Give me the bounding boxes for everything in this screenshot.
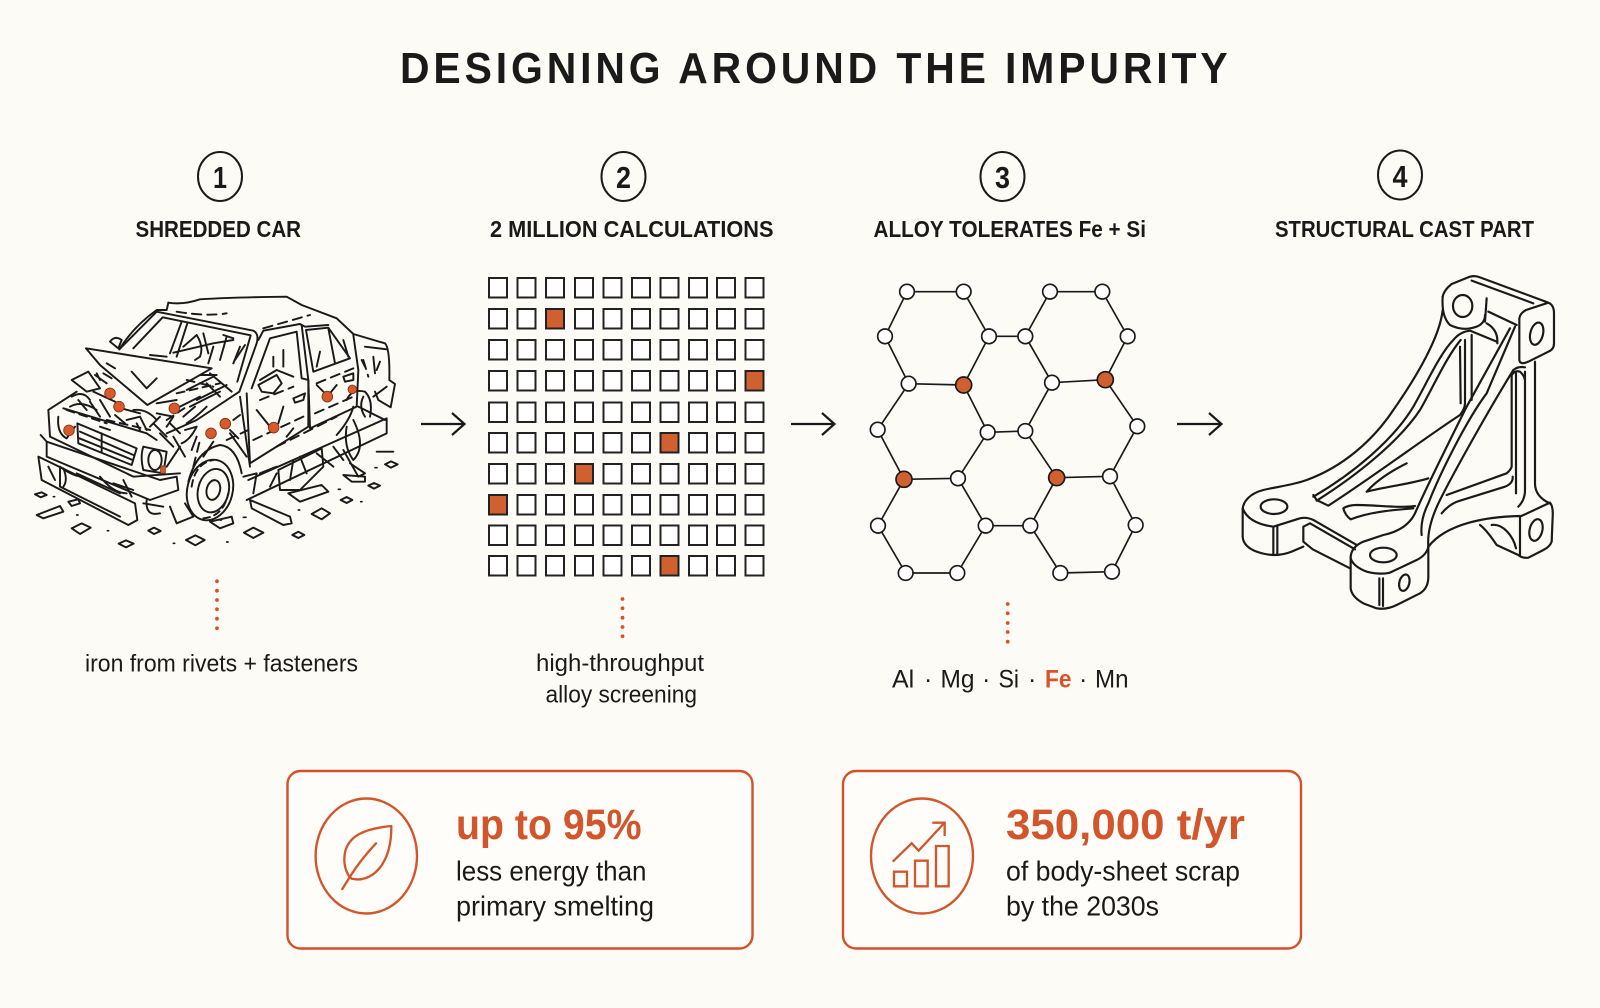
callout marker: lattice dotted leader [1006, 602, 1010, 644]
step 1 number badge [198, 152, 242, 201]
caption: alloy elements: · [924, 666, 932, 694]
step 3 number badge [980, 152, 1024, 201]
stat panel: energy savings [288, 771, 752, 948]
stat description: less energy than [456, 856, 646, 886]
step 2 number badge [602, 152, 646, 201]
left window ribs [1313, 331, 1497, 497]
arrow 2 to 3 [791, 413, 834, 435]
callout marker: car dotted leader [215, 579, 219, 630]
illustration: shredded car [35, 297, 398, 547]
lower web [1367, 463, 1428, 492]
caption: alloy elements [892, 666, 1128, 694]
caption: alloy elements: Fe [1045, 666, 1072, 694]
title: DESIGNING AROUND THE IMPURITY [400, 45, 1228, 93]
step 4 number badge [1378, 150, 1422, 200]
step 3 number badge: 3 [995, 160, 1010, 195]
iron atoms [896, 372, 1113, 487]
icon: rising bar chart [871, 798, 973, 914]
step 4 number badge: 4 [1392, 159, 1408, 194]
left strut [1243, 310, 1443, 555]
caption: high-throughput alloy screening: alloy screening [546, 682, 697, 708]
step 1 heading: SHREDDED CAR [136, 216, 301, 242]
stat: up to 95%: up to 95% [456, 801, 642, 849]
stat: 350,000 t/yr: 350,000 t/yr [1006, 801, 1245, 849]
step 3 heading: ALLOY TOLERATES Fe + Si [874, 216, 1146, 242]
stat description [1006, 856, 1240, 922]
caption: alloy elements: · [1079, 666, 1087, 694]
stat description: by the 2030s [1006, 890, 1159, 922]
stat description [456, 856, 654, 922]
caption: high-throughput alloy screening [536, 650, 704, 708]
front pad [1351, 328, 1510, 557]
caption: alloy elements: · [1028, 666, 1036, 694]
stat description: of body-sheet scrap [1006, 856, 1240, 886]
caption: alloy elements: Si [998, 666, 1019, 694]
hexagonal alloy lattice [870, 284, 1145, 580]
caption: iron from rivets: iron from rivets + fasteners [85, 650, 358, 678]
caption: alloy elements: Mg [940, 666, 974, 694]
caption: alloy elements: Al [892, 666, 914, 694]
step 4 heading: STRUCTURAL CAST PART [1275, 216, 1534, 242]
step 1 number badge: 1 [213, 160, 227, 195]
icon: leaf [316, 798, 417, 914]
arrow 3 to 4 [1177, 413, 1222, 435]
diagonal strut [1421, 327, 1515, 535]
callout marker: grid dotted leader [621, 597, 624, 638]
illustration: structural cast part [1243, 276, 1554, 609]
screening grid [489, 278, 764, 576]
step 2 number badge: 2 [616, 160, 631, 195]
top block [1443, 276, 1554, 363]
stat description: primary smelting [456, 890, 654, 922]
step 2 heading: 2 MILLION CALCULATIONS [490, 216, 774, 242]
caption: alloy elements: Mn [1095, 666, 1128, 694]
caption: high-throughput alloy screening: high-throughput [536, 650, 704, 677]
caption: alloy elements: · [982, 666, 990, 694]
stat panel: scrap volume [843, 771, 1301, 948]
bottom right pad [1480, 503, 1553, 558]
arrow 1 to 2 [421, 413, 464, 435]
right column [1535, 362, 1550, 503]
iron contamination dots [64, 385, 357, 473]
